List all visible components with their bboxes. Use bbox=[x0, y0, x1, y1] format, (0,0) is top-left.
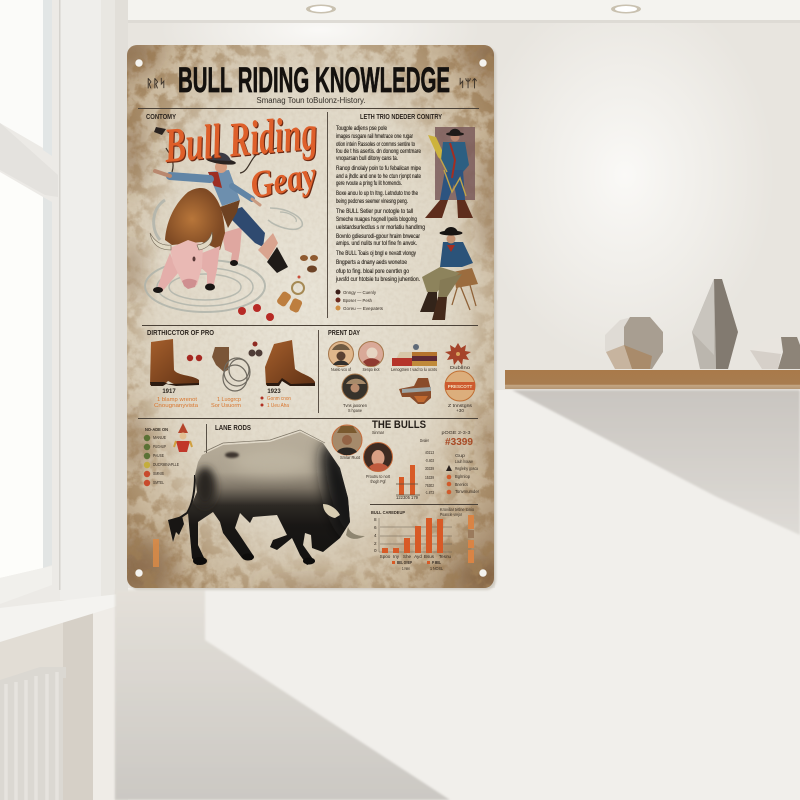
bull pink front legs bbox=[157, 246, 220, 292]
legend: Bposer — Pesh bbox=[343, 298, 372, 303]
small bar chart bbox=[396, 465, 420, 500]
list of values column: 15339 bbox=[425, 475, 434, 480]
bull rear pink leg bbox=[222, 227, 242, 265]
section heading: THE BULLS bbox=[372, 419, 426, 431]
shelf shadow bbox=[512, 390, 800, 535]
body paragraphs: Bngperts a dnany aeds wonetoe bbox=[336, 259, 407, 266]
window sill bbox=[0, 593, 127, 642]
portrait: woman: thogh Pgf bbox=[370, 479, 386, 484]
section label: contomy: CONTOMY bbox=[146, 112, 176, 121]
portrait: man with hat bbox=[332, 425, 362, 460]
metal sign poster bbox=[127, 45, 494, 588]
map emblem bbox=[399, 378, 431, 404]
gridlines and axes bbox=[379, 518, 452, 552]
right icon list: Reglelny gosca bbox=[455, 466, 478, 471]
legend: Onngy — Cuenly bbox=[343, 290, 377, 295]
right icon list: Bnenlcs bbox=[455, 482, 469, 487]
axis value labels: 4 bbox=[374, 533, 377, 538]
portrait: woman bbox=[364, 442, 392, 484]
flag map graphic bbox=[391, 344, 438, 372]
axis value labels: 0 bbox=[374, 548, 377, 553]
star badge: Dubllno bbox=[450, 365, 471, 370]
chart note: Poancle vrejor bbox=[440, 512, 462, 517]
body paragraphs: uelstardsurlectlus s nr morlatiu handlrng bbox=[336, 224, 425, 231]
chart legend: P MEL bbox=[432, 560, 441, 565]
lasso bbox=[166, 147, 280, 173]
red dots bbox=[187, 355, 202, 361]
divider lines bbox=[138, 108, 479, 504]
axis value labels: 2 bbox=[374, 541, 377, 546]
legend heading: NO-ADE ON bbox=[145, 427, 169, 432]
rider arms bbox=[155, 171, 260, 205]
right icon list: Bglrnlop bbox=[455, 474, 470, 479]
rider vest bbox=[208, 172, 222, 188]
list of values column bbox=[420, 438, 434, 495]
body paragraphs: Ranop dinolaly poin to fu febalican mipe bbox=[336, 165, 421, 172]
gear items bbox=[238, 255, 318, 321]
chart note bbox=[440, 507, 474, 517]
rider leg and boot bbox=[232, 207, 288, 273]
right year: 1923 bbox=[267, 389, 281, 395]
body paragraphs: Bovnlo gdiesurodi-gpour hraim brwecar bbox=[336, 233, 421, 240]
clown figure icon bbox=[174, 423, 192, 452]
orange stat heading: pOGE 2-3-3 bbox=[442, 430, 471, 435]
left caption: Cnougnanyvista bbox=[154, 403, 198, 409]
right icon list: Tonvrnumder bbox=[455, 489, 479, 494]
body paragraphs: amips. und nulits nur tol fine fn anvok. bbox=[336, 240, 417, 247]
rider chaps bbox=[220, 200, 240, 228]
panel: present day bbox=[328, 328, 475, 413]
flag map graphic: Lenogtnen t vad to lu ocnts bbox=[391, 367, 438, 372]
left year: 1917 bbox=[162, 389, 176, 395]
bull back outline bbox=[204, 430, 325, 452]
right list: Gonm cnon bbox=[267, 396, 291, 402]
list of values column: 30339 bbox=[425, 466, 434, 471]
chart title: BULL CAREDEUP bbox=[371, 510, 405, 515]
map shape bbox=[212, 347, 229, 372]
right icon list bbox=[446, 453, 479, 494]
body paragraphs: vnoparsan bull ditony cans ta. bbox=[336, 155, 398, 162]
chart legend: 1 Nen bbox=[402, 566, 410, 571]
portrait: rider one: Nuelo vco of bbox=[331, 367, 352, 372]
right title ornament: ᛋᛘᛏ bbox=[458, 77, 478, 90]
chart legend bbox=[392, 560, 443, 571]
vase: tall diamond bbox=[692, 279, 738, 369]
portrait: rider three: S hpane bbox=[348, 408, 362, 413]
body paragraphs: fou de t his asertis. dn donong cerntmare bbox=[336, 148, 421, 155]
chart note: Krovillar tetlne tonio bbox=[440, 507, 474, 512]
body paragraphs: and a jhdlc and one to he ctun rjonpt nate bbox=[336, 173, 421, 180]
section heading: LETH TRIO NDEDER CONITRY bbox=[360, 112, 442, 121]
right icon list: Louh lnouve bbox=[455, 459, 473, 464]
water swirl around bull bbox=[145, 200, 302, 312]
body paragraphs: juvsfd cur htotsie tu bresing juhention. bbox=[335, 276, 420, 283]
chart legend: 1 NOSL bbox=[430, 566, 443, 571]
bull horns bbox=[323, 504, 340, 518]
left boot sole bbox=[150, 382, 199, 386]
body paragraphs: being pedcnes seemer vinesng peng. bbox=[336, 198, 408, 205]
bull body bbox=[188, 432, 350, 565]
x axis labels: Ayd bbox=[414, 554, 422, 559]
body paragraphs bbox=[335, 125, 425, 283]
right list bbox=[260, 396, 291, 409]
section heading: lane rods: LANE RODS bbox=[215, 423, 251, 432]
rider head and hat bbox=[206, 153, 236, 173]
bull tail bbox=[168, 475, 195, 542]
panel: right column text and cowboys bbox=[335, 112, 478, 320]
subtitle: Smanag Toun toBulonz-History. bbox=[256, 96, 366, 105]
legend entries: PUGHUP bbox=[153, 444, 166, 449]
portrait: rider two: Senpo leot bbox=[362, 367, 380, 372]
legend bbox=[336, 290, 384, 311]
body paragraphs: Tougple adjens pse pole bbox=[336, 125, 387, 132]
small bar chart: 122305 179 bbox=[396, 495, 418, 500]
body paragraphs: otion intein Rassoles or conmns sentire to bbox=[336, 141, 415, 148]
round stamp badge: Z tnnstgns bbox=[448, 403, 473, 408]
middle caption: Sor Usuorm bbox=[211, 403, 241, 409]
floor-side wall shadow bbox=[115, 590, 450, 800]
bull hooves bbox=[193, 554, 315, 565]
wooden shelf bbox=[505, 370, 800, 389]
legend entries: DUCRMINAPLLE bbox=[153, 462, 179, 467]
script headline: bull riding bbox=[166, 118, 317, 198]
body paragraphs: gere rvoute a pring fu lit homends. bbox=[336, 180, 402, 187]
legend entries: PAUSE bbox=[153, 453, 164, 458]
chart legend: BEL OVEP bbox=[397, 560, 412, 565]
round stamp badge: PRESCOTT bbox=[448, 384, 472, 389]
big number: #3399 bbox=[445, 437, 473, 448]
body paragraphs: images rusgare rail hmetrace one rugar bbox=[336, 133, 414, 140]
vertical orange side text bbox=[153, 539, 159, 567]
body paragraphs: The BULL Setier pur notogle to tall bbox=[336, 208, 413, 215]
bull hooves bbox=[153, 260, 238, 293]
round stamp badge: +30 bbox=[456, 408, 464, 413]
panel: bull riding gear illustration bbox=[145, 105, 321, 321]
list of values column: -0.403 bbox=[425, 458, 434, 463]
bull head bbox=[170, 240, 203, 289]
radiator bbox=[0, 667, 66, 800]
body paragraphs: Boxe anou lo up tn ltng. Letnduto tno the bbox=[336, 190, 418, 197]
script headline: bull riding: Geay bbox=[248, 155, 321, 208]
section heading: DIRTHICCTOR OF PRO bbox=[147, 328, 214, 337]
right list: 1 Ueu Aha bbox=[267, 403, 289, 409]
body paragraphs: Smeche nuages hsgnell lpeils blogolng bbox=[336, 216, 417, 223]
mounting holes bbox=[135, 59, 487, 577]
vase: low faceted form bbox=[750, 337, 800, 369]
legend entries: MANUE bbox=[153, 435, 166, 440]
lasso rope coils bbox=[223, 358, 250, 391]
body paragraphs: ofup to fing. bloal pore cenrtkn go bbox=[336, 268, 409, 275]
portrait: rider three bbox=[342, 374, 368, 413]
x axis labels: Iny bbox=[393, 554, 400, 559]
portrait: rider two bbox=[358, 342, 384, 372]
portrait: woman: Proutru to nort bbox=[366, 474, 391, 479]
x axis labels: Bsus bbox=[424, 554, 435, 559]
bull brown hump bbox=[165, 188, 225, 250]
big black bull illustration bbox=[168, 430, 367, 565]
script headline: bull riding: Bull Riding bbox=[163, 106, 320, 174]
list of values column: Dealer bbox=[420, 438, 429, 443]
x axis labels: She bbox=[403, 554, 412, 559]
list of values column: 40213 bbox=[425, 450, 434, 455]
script headline: bull riding: Geay bbox=[247, 154, 320, 207]
small caption above portrait: Sinmar bbox=[372, 430, 384, 435]
star badge bbox=[445, 343, 471, 370]
left title ornament: ᚱᚱᛋ bbox=[146, 78, 166, 90]
vase: faceted ball bbox=[605, 317, 663, 369]
left cowboy boot bbox=[150, 339, 199, 385]
legend entries bbox=[144, 435, 179, 486]
middle caption bbox=[211, 397, 241, 409]
cowboy sitting on saddle bbox=[420, 227, 478, 320]
body paragraphs: The BULL Toais oj bngl e nevatt vlongy bbox=[336, 250, 417, 257]
portrait: rider three: Tvns jaoonen bbox=[343, 403, 367, 408]
round stamp badge bbox=[445, 371, 475, 413]
panel: birth history boots bbox=[147, 328, 315, 409]
ceiling with lights bbox=[105, 0, 800, 23]
list of values column: -1.873 bbox=[425, 490, 434, 495]
axis value labels: 6 bbox=[374, 525, 377, 530]
axis value labels bbox=[374, 517, 377, 553]
portrait: rider one bbox=[328, 342, 354, 372]
legend entries: SMNIS bbox=[153, 471, 164, 476]
section heading: PRENT DAY bbox=[328, 328, 360, 337]
right cowboy boot bbox=[265, 340, 315, 385]
right side orange stack bbox=[468, 515, 474, 563]
wall under window bbox=[0, 604, 115, 800]
poster paper texture bbox=[127, 45, 494, 588]
bull horns bbox=[150, 232, 212, 250]
middle caption: 1 Luogrcp bbox=[217, 397, 241, 403]
bull shading bbox=[194, 438, 367, 542]
small buckle dots bbox=[248, 342, 262, 356]
orange bars bbox=[382, 518, 443, 553]
cowboy standing with rope bbox=[425, 127, 475, 218]
panel: the bulls bbox=[332, 419, 479, 500]
poster shadow bbox=[129, 47, 496, 590]
x axis labels: Spoo bbox=[380, 554, 391, 559]
small rope star ornament bbox=[154, 127, 166, 135]
left caption: 1 blamp wrenot bbox=[157, 397, 198, 403]
rider torso bbox=[208, 170, 240, 206]
legend: Goreu — Evepatets bbox=[343, 306, 384, 311]
left caption bbox=[154, 397, 198, 409]
x axis labels bbox=[380, 554, 452, 559]
x axis labels: Tesnu bbox=[439, 554, 452, 559]
right icon list: Gup bbox=[455, 453, 466, 458]
title: BULL RIDING KNOWLEDGE bbox=[178, 61, 450, 100]
list of values column: 76302 bbox=[425, 483, 434, 488]
axis value labels: 8 bbox=[374, 517, 377, 522]
right boot sole bbox=[266, 378, 315, 386]
panel: lower left legend bbox=[144, 423, 251, 567]
window with frame and reveal bbox=[0, 0, 128, 610]
legend entries: SMTEL bbox=[153, 480, 164, 485]
script headline: bull riding: Bull Riding bbox=[162, 105, 319, 173]
panel: bull career chart bbox=[371, 507, 474, 571]
portrait: man with hat: Smlar Ruot bbox=[340, 455, 361, 460]
